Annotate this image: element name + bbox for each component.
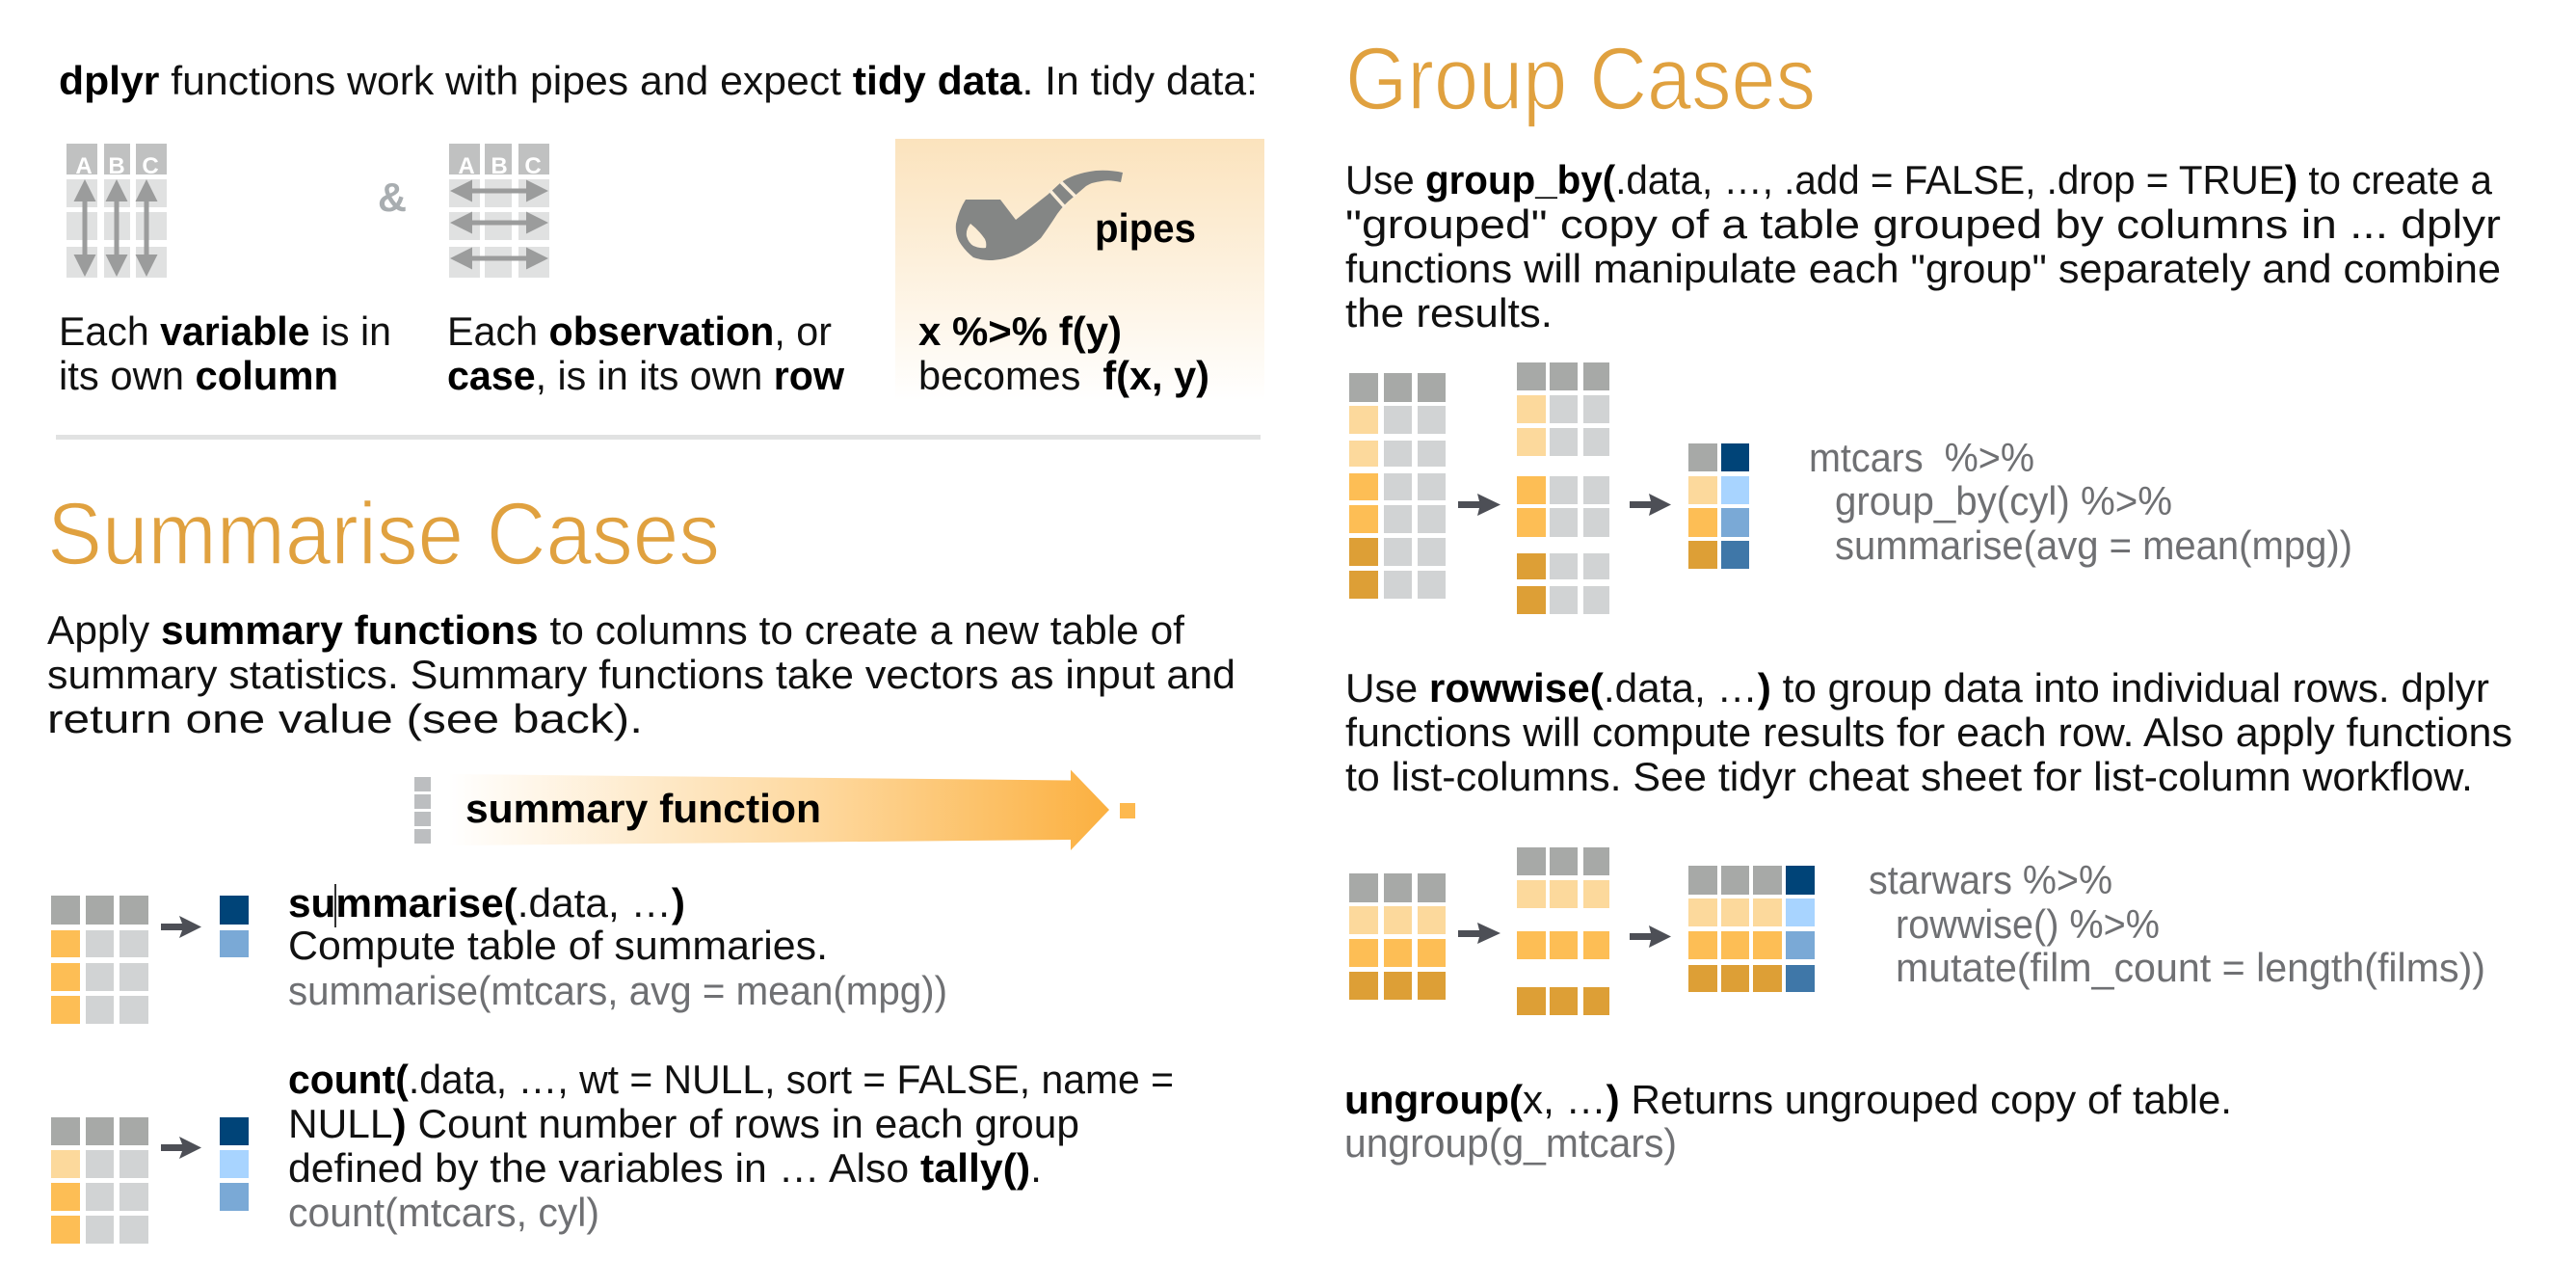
diagram: group_by <box>1349 362 1749 614</box>
text: ungroup: ungroup(x, …) Returns ungrouped copy of table. <box>1344 1077 2232 1122</box>
text: summarise intro: return one value (see back). <box>47 696 643 741</box>
text: pipe syntax: x %>% f(y) <box>918 308 1122 354</box>
code: group_by example: group_by(cyl) %>% <box>1835 478 2172 523</box>
code: group_by example: summarise(avg = mean(mpg)) <box>1835 523 2352 568</box>
text: pipe syntax: becomes f(x, y) <box>918 353 1209 398</box>
text: pipe syntax <box>918 308 1209 398</box>
text: summarise: summarise(mtcars, avg = mean(mpg)) <box>288 968 947 1013</box>
code: rowwise example: starwars %>% <box>1869 857 2112 902</box>
code: rowwise example: mutate(film_count = length(films)) <box>1896 945 2485 990</box>
icon: observations in rows table: A <box>458 153 475 179</box>
text: summarise: summarise(.data, …) <box>288 880 685 925</box>
code: group_by example: mtcars %>% <box>1809 435 2034 480</box>
text: group_by: Use group_by(.data, …, .add = FALSE, .drop = TRUE) to create a <box>1345 157 2493 202</box>
diagram: summary function <box>414 769 1135 850</box>
icon: observations in rows table: B <box>491 153 508 179</box>
text: rowwise: to list-columns. See tidyr cheat sheet for list-column workflow. <box>1345 754 2473 799</box>
text: ungroup: ungroup(g_mtcars) <box>1344 1120 1677 1166</box>
text: each observation: Each observation, or <box>447 308 832 354</box>
intro sentence: dplyr functions work with pipes and expect tidy data. In tidy data: <box>59 58 1258 103</box>
text: summarise <box>288 880 947 1013</box>
text: ungroup <box>1344 1077 2232 1166</box>
icon: variables in columns table: A <box>75 153 93 179</box>
text: count <box>288 1057 1174 1235</box>
heading: Group Cases: Group Cases <box>1345 30 1816 128</box>
text: count: NULL) Count number of rows in each group <box>288 1101 1079 1146</box>
text: rowwise: Use rowwise(.data, …) to group data into individual rows. dplyr <box>1345 665 2489 711</box>
diagram: count <box>51 1117 249 1244</box>
text: group_by <box>1345 157 2501 335</box>
text: count: count(mtcars, cyl) <box>288 1190 599 1235</box>
text: summarise intro: Apply summary functions to columns to create a new table of <box>47 607 1184 653</box>
diagram: summary function: summary function <box>465 786 821 831</box>
text: group_by: functions will manipulate each "group" separately and combine <box>1345 246 2501 291</box>
heading: Summarise Cases: Summarise Cases <box>47 485 720 583</box>
text: rowwise: functions will compute results for each row. Also apply functions <box>1345 710 2512 755</box>
text cursor <box>334 884 336 927</box>
pipes label: pipes <box>1095 205 1196 251</box>
code: rowwise example: rowwise() %>% <box>1896 901 2160 947</box>
icon: variables in columns table: C <box>142 153 159 179</box>
text: count: count(.data, …, wt = NULL, sort = FALSE, name = <box>288 1057 1174 1102</box>
text: each variable: Each variable is in <box>59 308 391 354</box>
icon: observations in rows table: C <box>524 153 542 179</box>
icon: observations in rows table <box>449 144 549 278</box>
text: group_by: "grouped" copy of a table grouped by columns in ... dplyr <box>1345 201 2501 247</box>
code: rowwise example <box>1869 857 2485 990</box>
diagram: rowwise <box>1349 847 1815 1015</box>
text: summarise intro <box>47 607 1235 741</box>
icon: pipe <box>956 171 1123 260</box>
diagram: summarise <box>51 896 249 1024</box>
text: count: defined by the variables in … Also tally(). <box>288 1145 1042 1191</box>
text: group_by: the results. <box>1345 290 1553 335</box>
text: summarise intro: summary statistics. Summary functions take vectors as input and <box>47 652 1235 697</box>
text: rowwise <box>1345 665 2512 799</box>
ampersand: & <box>378 174 407 220</box>
code: group_by example <box>1809 435 2352 568</box>
icon: variables in columns table: B <box>108 153 125 179</box>
text: each variable: its own column <box>59 353 338 398</box>
text: summarise: Compute table of summaries. <box>288 923 828 968</box>
text: each variable <box>59 308 391 398</box>
text: each observation <box>447 308 844 398</box>
icon: variables in columns table <box>66 144 167 278</box>
panel: pipes <box>895 139 1264 401</box>
text: each observation: case, is in its own row <box>447 353 844 398</box>
